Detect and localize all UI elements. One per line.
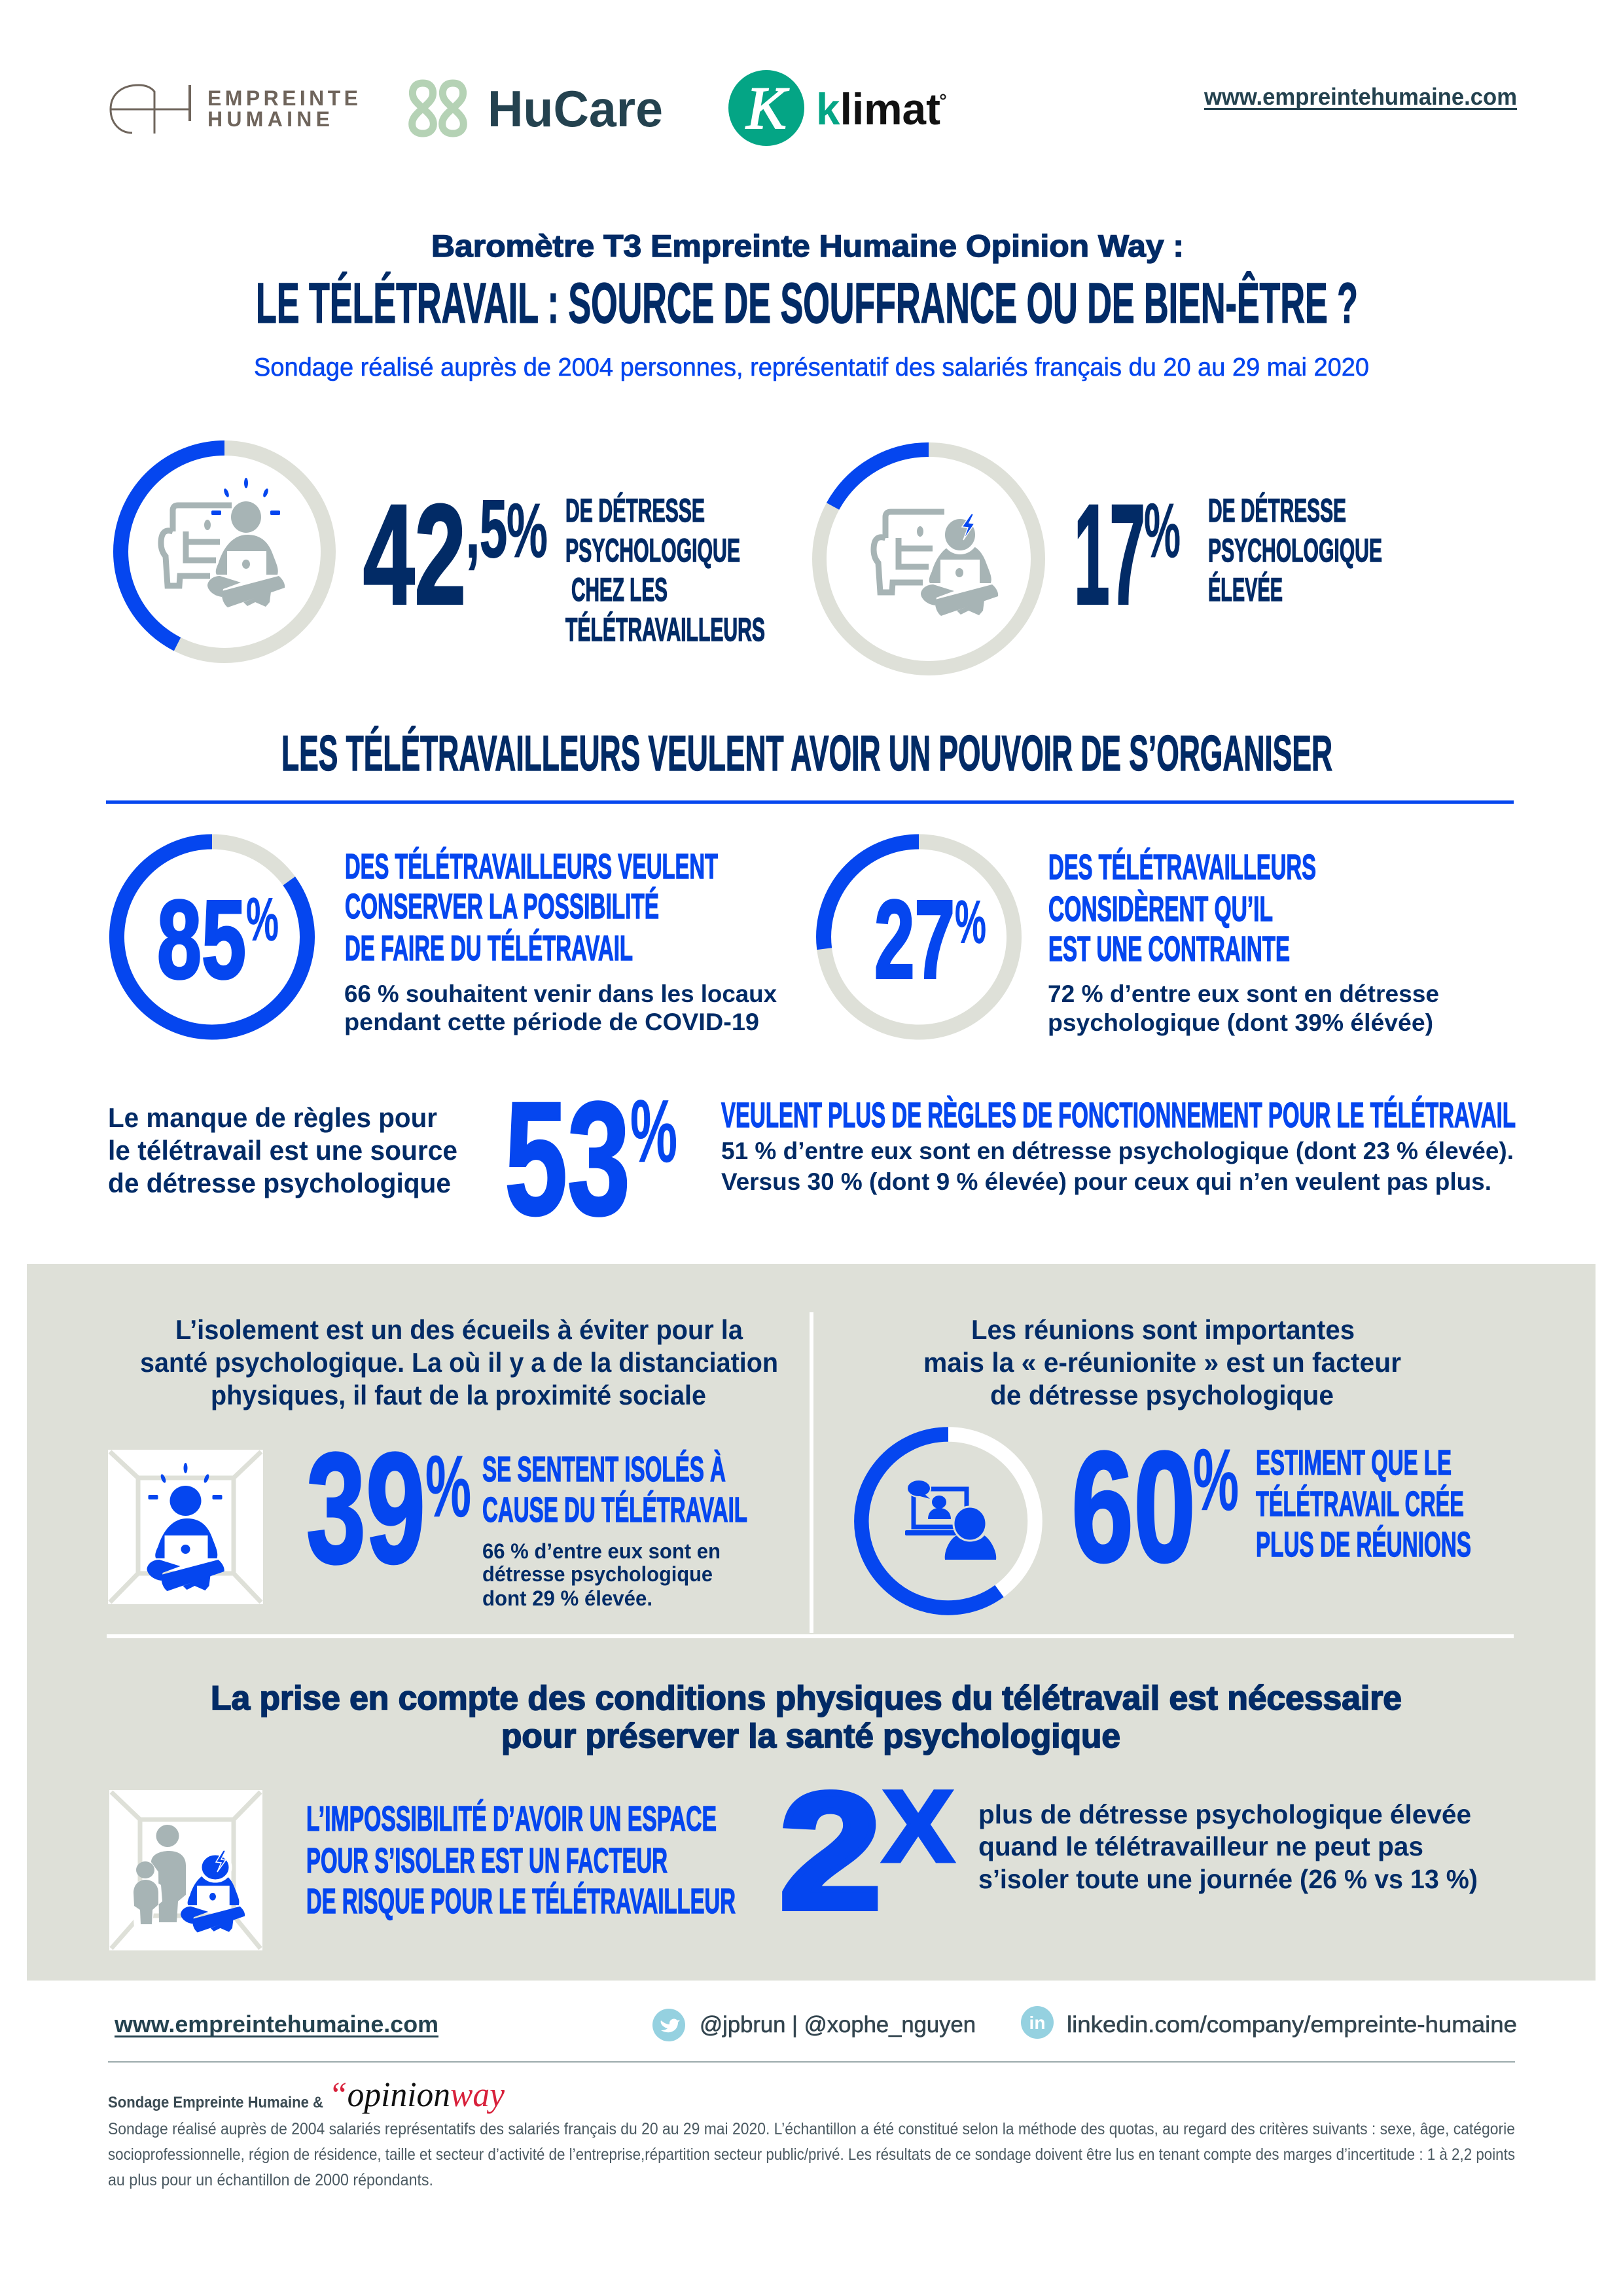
- headline: feel isolated: [482, 1450, 747, 1530]
- stat: 17%: 17: [1074, 475, 1145, 634]
- headline: more meetings: PLUS DE RÉUNIONS: [1256, 1525, 1471, 1564]
- headline: more meetings: [1256, 1443, 1471, 1564]
- panel: 42,5% distress: [120, 448, 765, 656]
- icon: video meeting: [905, 1480, 996, 1560]
- footer: twitter: @jpbrun | @xophe_nguyen: [700, 2012, 976, 2037]
- headline: feel isolated: CAUSE DU TÉLÉTRAVAIL: [482, 1490, 747, 1530]
- headline: feel isolated: SE SENTENT ISOLÉS À: [482, 1450, 726, 1489]
- footer: linkedin: linkedin.com/company/empreinte-humaine: [1067, 2012, 1517, 2037]
- stat: 85%: 85: [157, 878, 246, 1002]
- panel: 85%: [116, 842, 777, 1035]
- stat: 53%: 53: [505, 1069, 630, 1249]
- detail: 2x distress: quand le télétravailleur ne peut pas: [978, 1831, 1423, 1861]
- detail: 66% isolated: 66 % d’entre eux sont en: [482, 1539, 721, 1563]
- text: lack of rules: le télétravail est une source: [108, 1135, 457, 1166]
- heading: physical conditions: pour préserver la santé psychologique: [501, 1717, 1120, 1755]
- label: distress: PSYCHOLOGIQUE: [565, 532, 740, 569]
- stat: 39%: 39: [306, 1420, 425, 1596]
- donut: 60%: [861, 1434, 1035, 1608]
- text: lack of rules: [108, 1102, 457, 1198]
- stat: 27%: 27: [874, 878, 955, 1002]
- divider lines: [107, 1312, 1514, 1638]
- logo: Empreinte Humaine: EMPREINTE: [207, 86, 358, 110]
- stat: 17%: %: [1144, 488, 1181, 574]
- detail: 66% isolated: détresse psychologique: [482, 1562, 713, 1586]
- detail: 66%: 66 % souhaitent venir dans les locaux: [344, 980, 777, 1007]
- text: isolation intro: santé psychologique. La où il y a de la distanciation: [140, 1347, 778, 1378]
- footer: survey credit with opinionway logo: Sondage Empreinte Humaine &: [108, 2094, 323, 2111]
- headline: no isolated space: DE RISQUE POUR LE TÉLÉTRAVAILLEUR: [306, 1882, 736, 1921]
- stat: 2x: [779, 1759, 954, 1943]
- donut: 42.5%: [120, 448, 329, 656]
- detail: 72%: [1048, 980, 1439, 1036]
- panel: 53% rules: [108, 1069, 1516, 1249]
- label: high distress: PSYCHOLOGIQUE: [1208, 532, 1382, 569]
- icon: family at home with stressed teleworker: [109, 1790, 262, 1950]
- headline: more meetings: ESTIMENT QUE LE: [1256, 1443, 1452, 1482]
- text: meetings intro: [923, 1314, 1401, 1410]
- label: high distress: ÉLEVÉE: [1208, 571, 1283, 608]
- label: distress: CHEZ LES: [571, 571, 668, 608]
- text: lack of rules: Le manque de règles pour: [108, 1102, 437, 1133]
- label: distress: [565, 492, 765, 648]
- detail: 66%: pendant cette période de COVID-19: [344, 1009, 759, 1035]
- text: meetings intro: mais la « e-réunionite » est un facteur: [923, 1347, 1401, 1378]
- footer: twitter: [652, 2009, 976, 2041]
- text: lack of rules: de détresse psychologique: [108, 1168, 451, 1198]
- logo: Empreinte Humaine: [111, 85, 358, 134]
- detail: 66% isolated: dont 29 % élevée.: [482, 1587, 652, 1610]
- detail: 72%: 72 % d’entre eux sont en détresse: [1048, 980, 1439, 1007]
- detail: 2x distress: [978, 1799, 1478, 1894]
- detail: 66%: [344, 980, 777, 1035]
- detail: 51% vs 30%: 51 % d’entre eux sont en détresse psychologique (dont 23 % élevée).: [721, 1138, 1514, 1164]
- text: isolation intro: physiques, il faut de la proximité sociale: [211, 1380, 706, 1410]
- label: high distress: [1208, 492, 1382, 608]
- logo: klimat: [728, 70, 945, 146]
- stat: 60%: %: [1193, 1431, 1239, 1529]
- headline: keep telework: DE FAIRE DU TÉLÉTRAVAIL: [345, 929, 633, 968]
- headline: constraint: [1048, 848, 1316, 969]
- stat: 85%: %: [246, 885, 279, 954]
- footer: website link: www.empreintehumaine.com: [114, 2011, 438, 2037]
- text: isolation intro: L’isolement est un des écueils à éviter pour la: [175, 1314, 743, 1345]
- panel: 27%: [823, 842, 1439, 1036]
- logo: klimat: K: [745, 75, 789, 141]
- headline: constraint: CONSIDÈRENT QU’IL: [1048, 889, 1273, 929]
- logo: HuCare: [412, 80, 663, 137]
- footer: methodology note: Sondage réalisé auprès de 2004 salariés représentatifs des salariés français du 20 au 29 mai 2020. L’échantillon a été constitué selon la méthode des quotas, au regard des critères suivants : sexe, âge, catégorie: [108, 2120, 1515, 2138]
- headline: constraint: EST UNE CONTRAINTE: [1048, 929, 1290, 969]
- stat: 2x: X: [882, 1770, 954, 1884]
- detail: 2x distress: s’isoler toute une journée (26 % vs 13 %): [978, 1864, 1478, 1894]
- title block: [254, 228, 1369, 382]
- headline: keep telework: CONSERVER LA POSSIBILITÉ: [345, 887, 659, 926]
- text: isolation intro: [140, 1314, 778, 1410]
- headline: more meetings: TÉLÉTRAVAIL CRÉE: [1256, 1484, 1464, 1524]
- stat: 42,5%: ,5: [466, 484, 507, 575]
- icon: isolated person in room: [108, 1450, 263, 1604]
- headline: keep telework: DES TÉLÉTRAVAILLEURS VEULENT: [345, 847, 718, 886]
- heading: autonomy: [106, 726, 1514, 804]
- icon: person on sofa with rays: [161, 478, 285, 607]
- footer: methodology note: [108, 2120, 1515, 2189]
- donut: 17%: [819, 450, 1038, 668]
- text: meetings intro: Les réunions sont importantes: [971, 1314, 1355, 1345]
- headline: no isolated space: L’IMPOSSIBILITÉ D’AVOIR UN ESPACE: [306, 1799, 717, 1839]
- detail: 72%: psychologique (dont 39% élévée): [1048, 1009, 1433, 1036]
- stat: 42,5%: 42: [363, 475, 466, 634]
- headline: keep telework: [345, 847, 718, 968]
- headline: no isolated space: POUR S’ISOLER EST UN FACTEUR: [306, 1841, 668, 1880]
- heading: physical conditions: La prise en compte des conditions physiques du télétravail est nécessaire: [211, 1679, 1402, 1717]
- detail: 2x distress: plus de détresse psychologique élevée: [978, 1799, 1471, 1829]
- label: distress: DE DÉTRESSE: [565, 492, 705, 529]
- stat: 60%: 60: [1071, 1419, 1196, 1594]
- stat: 42,5%: %: [507, 488, 548, 574]
- logo: Empreinte Humaine: HUMAINE: [207, 107, 330, 131]
- stat: 17%: [1074, 475, 1181, 634]
- stat: 53%: %: [630, 1081, 677, 1181]
- detail: 51% vs 30%: Versus 30 % (dont 9 % élevée) pour ceux qui n’en veulent pas plus.: [721, 1168, 1491, 1195]
- detail: 51% vs 30%: [721, 1138, 1514, 1195]
- headline: no isolated space: [306, 1799, 736, 1921]
- text: meetings intro: de détresse psychologique: [990, 1380, 1334, 1410]
- footer: survey credit with opinionway logo: [108, 2075, 505, 2114]
- logo: HuCare: HuCare: [488, 80, 663, 137]
- panel: 17% high distress: [819, 450, 1382, 668]
- footer: survey credit with opinionway logo: “opinionway: [329, 2075, 505, 2114]
- donut: 85%: [116, 842, 308, 1032]
- stat: 2x: 2: [779, 1759, 882, 1943]
- footer: linkedin: [1021, 2006, 1517, 2039]
- donut: 27%: [823, 842, 1014, 1032]
- footer: linkedin: in: [1029, 2013, 1045, 2033]
- headline: constraint: DES TÉLÉTRAVAILLEURS: [1048, 848, 1316, 887]
- website link top: www.empreintehumaine.com: [1204, 83, 1517, 110]
- stat: 39%: %: [425, 1438, 471, 1535]
- title block: Sondage réalisé auprès de 2004 personnes, représentatif des salariés français du 20 au 29 mai 2020: [254, 353, 1369, 382]
- heading: physical conditions: [211, 1679, 1402, 1755]
- panel: grey background section: [27, 1264, 1596, 1981]
- label: distress: TÉLÉTRAVAILLEURS: [565, 611, 765, 648]
- title block: Baromètre T3 Empreinte Humaine Opinion Way :: [431, 228, 1184, 263]
- icon: stressed person on sofa: [874, 512, 998, 616]
- label: high distress: DE DÉTRESSE: [1208, 492, 1346, 529]
- detail: 66% isolated: [482, 1539, 721, 1610]
- logo: klimat: klimat: [816, 84, 940, 134]
- stat: 27%: %: [955, 888, 986, 956]
- footer: methodology note: au plus pour un échantillon de 2000 répondants.: [108, 2171, 433, 2189]
